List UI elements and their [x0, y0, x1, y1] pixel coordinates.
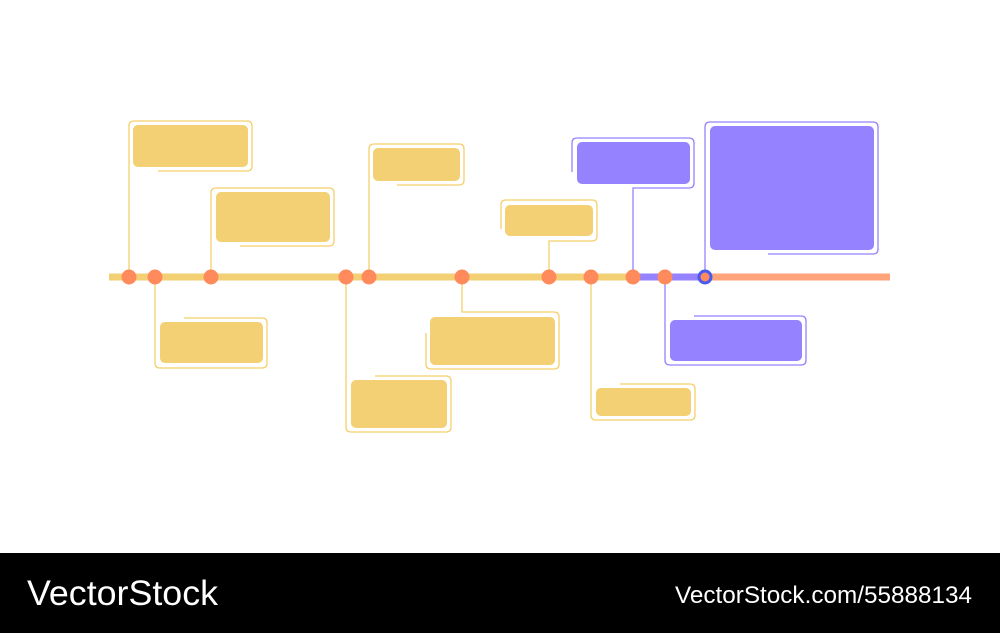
current marker ring — [699, 271, 711, 283]
callout 11 purple large (top) — [705, 122, 878, 277]
callout 8 (bottom) — [591, 277, 695, 420]
timeline axis — [109, 274, 890, 280]
callout 7 (top) — [501, 200, 597, 277]
footer url: VectorStock.com/55888134 — [675, 582, 972, 609]
callout 5 (bottom) — [346, 277, 451, 432]
callout 3 (bottom) — [155, 277, 267, 368]
footer bar — [0, 553, 1000, 633]
callout 6 (bottom) — [426, 277, 559, 369]
callout 10 purple (bottom) — [665, 277, 806, 365]
callout 9 purple (top) — [572, 138, 694, 277]
timeline dots — [122, 270, 672, 284]
callout 1 (top) — [129, 121, 252, 277]
callout 2 (top) — [211, 188, 334, 277]
callout 4 (top) — [369, 144, 464, 277]
footer brand: VectorStock — [27, 574, 219, 613]
